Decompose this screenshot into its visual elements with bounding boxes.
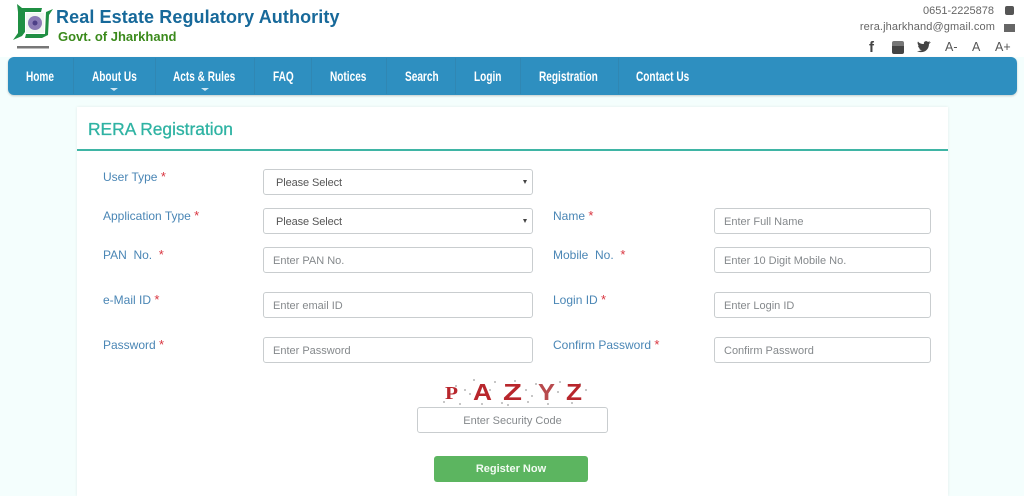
input: Password — [263, 337, 533, 363]
panel: registration form — [77, 107, 948, 496]
input: Confirm Password: Confirm Password — [724, 345, 814, 357]
button: Register Now: Register Now — [476, 463, 546, 475]
heading rule — [77, 149, 948, 151]
subtitle: Govt. of Jharkhand — [58, 29, 176, 44]
phone number: 0651-2225878 — [923, 5, 994, 17]
captcha image: P — [445, 383, 458, 403]
nav: Notices: Notices — [330, 68, 366, 84]
icon: facebook: f — [869, 39, 874, 56]
panel heading: RERA Registration — [88, 119, 233, 139]
font size controls: A- — [945, 40, 958, 54]
email address: rera.jharkhand@gmail.com — [860, 21, 995, 33]
input: PAN No.: Enter PAN No. — [273, 255, 344, 267]
icon: Jharkhand emblem logo — [13, 4, 53, 48]
nav: FAQ: FAQ — [273, 68, 294, 84]
label: Confirm Password: Confirm Password * — [553, 337, 659, 352]
font size controls: A+ — [995, 40, 1011, 54]
input: Name — [714, 208, 931, 234]
label: Name: Name * — [553, 208, 593, 223]
nav: Contact Us: Contact Us — [636, 68, 689, 84]
label: User Type: User Type * — [103, 169, 166, 184]
font size controls — [945, 40, 1011, 54]
input: Login ID — [714, 292, 931, 318]
input: Login ID: Enter Login ID — [724, 300, 794, 312]
input: Mobile No. — [714, 247, 931, 273]
input: PAN No. — [263, 247, 533, 273]
title: Real Estate Regulatory Authority — [56, 7, 340, 27]
input: Mobile No.: Enter 10 Digit Mobile No. — [724, 255, 846, 267]
captcha image: Y — [538, 379, 555, 405]
captcha image — [443, 379, 587, 406]
captcha image: Z — [566, 379, 582, 405]
label: Password: Password * — [103, 337, 164, 352]
nav: About Us: About Us — [92, 68, 137, 84]
label: Application Type: Application Type * — [103, 208, 199, 223]
input: security code: Enter Security Code — [463, 415, 562, 427]
captcha image: Z — [503, 379, 522, 405]
label: Mobile No.: Mobile No. * — [553, 247, 625, 262]
select: User Type: Please Select — [276, 177, 342, 189]
icon: mail — [1004, 24, 1015, 32]
font size controls: A — [972, 40, 980, 54]
icon: phone — [1005, 6, 1014, 15]
select: Application Type: Please Select — [276, 216, 342, 228]
label: e-Mail ID: e-Mail ID * — [103, 292, 159, 307]
input: e-Mail ID: Enter email ID — [273, 300, 343, 312]
button: Register Now — [434, 456, 588, 482]
navigation bar — [8, 57, 1017, 95]
label: Login ID: Login ID * — [553, 292, 606, 307]
captcha image: A — [473, 379, 492, 405]
select: User Type — [263, 169, 533, 195]
label: PAN No.: PAN No. * — [103, 247, 164, 262]
input: e-Mail ID — [263, 292, 533, 318]
nav: Acts & Rules: Acts & Rules — [173, 68, 235, 84]
header — [0, 0, 1024, 57]
input: Password: Enter Password — [273, 345, 351, 357]
dropdown caret — [110, 88, 118, 91]
input: security code — [417, 407, 608, 433]
dropdown caret — [201, 88, 209, 91]
icon: twitter — [917, 41, 931, 52]
input: Confirm Password — [714, 337, 931, 363]
nav: Registration: Registration — [539, 68, 598, 84]
nav: Home: Home — [26, 68, 54, 84]
nav: Login: Login — [474, 68, 501, 84]
nav: Search: Search — [405, 68, 439, 84]
input: Name: Enter Full Name — [724, 216, 803, 228]
select: Application Type — [263, 208, 533, 234]
icon: youtube — [892, 41, 904, 54]
